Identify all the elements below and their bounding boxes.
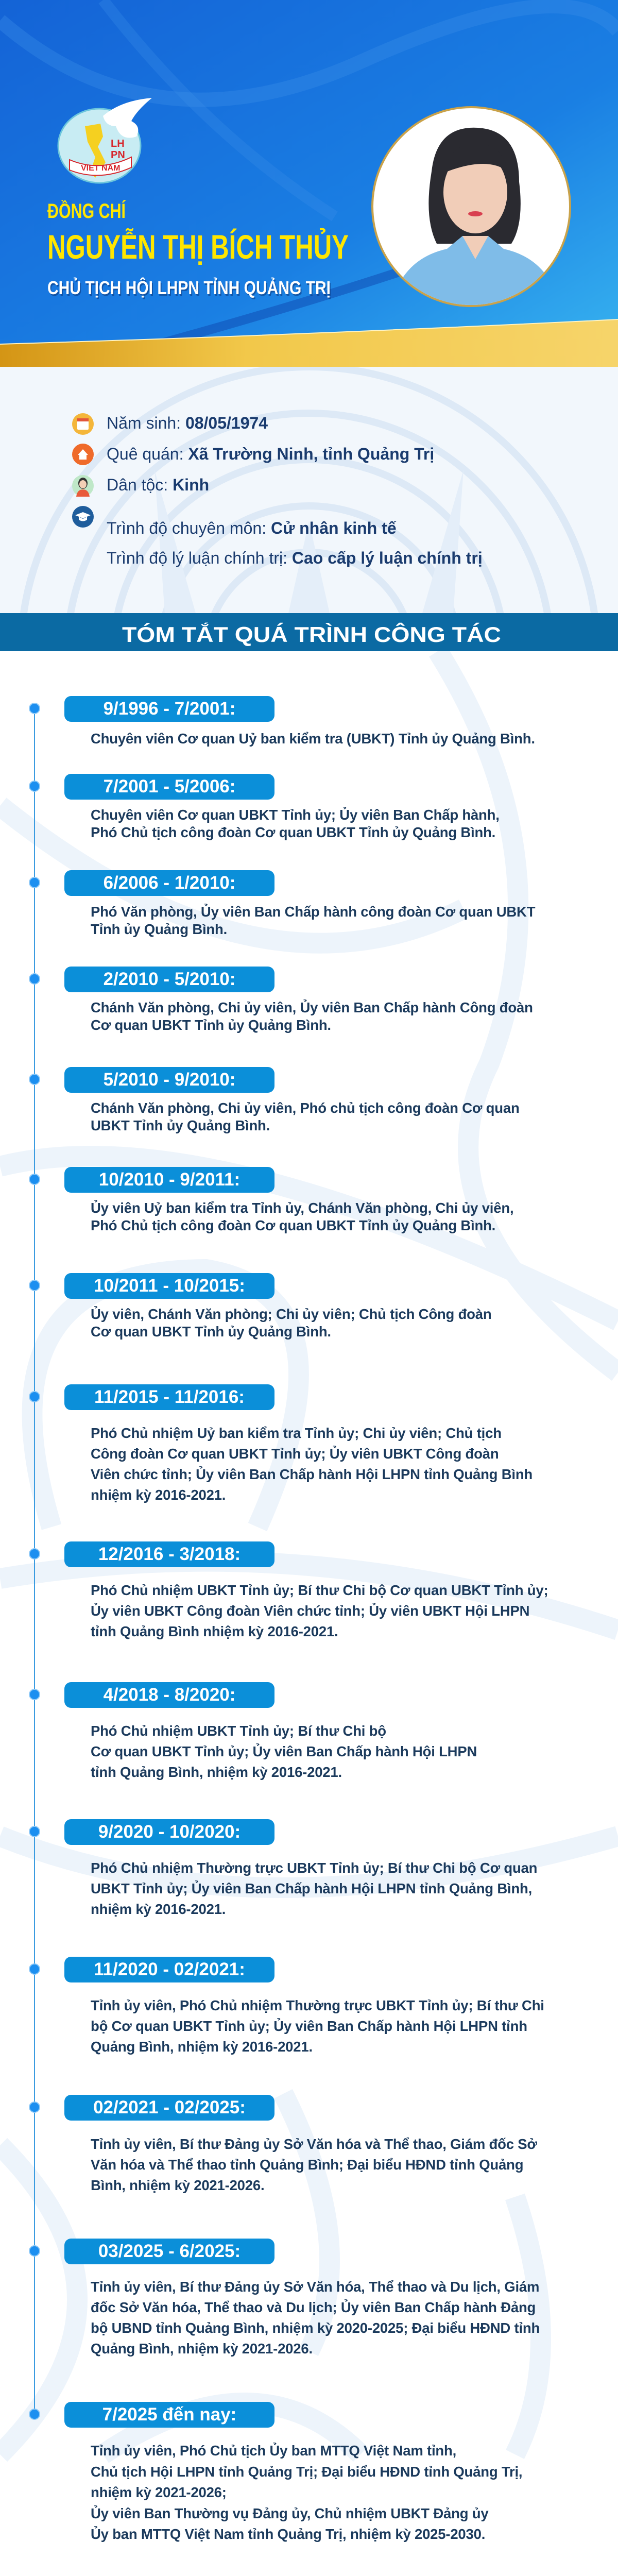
timeline entry: 2/2010 - 5/2010: Chánh Văn phòng, Chi ủy viên, Ủy viên Ban Chấp hành Công đoàn	[91, 999, 533, 1015]
timeline entry: 02/2021 - 02/2025: 02/2021 - 02/2025:	[93, 2097, 246, 2117]
info: education: Trình độ chuyên môn: Cử nhân kinh tế	[107, 519, 397, 537]
timeline entry: 6/2006 - 1/2010: Tỉnh ủy Quảng Bình.	[91, 921, 227, 937]
timeline entry: 02/2021 - 02/2025: Văn hóa và Thể thao tỉnh Quảng Bình; Đại biểu HĐND tỉnh Quảng	[91, 2157, 523, 2173]
info: ethnicity	[72, 475, 209, 497]
timeline entry: 03/2025 - 6/2025: 03/2025 - 6/2025:	[98, 2241, 241, 2261]
timeline entry: 7/2025 đến nay: nhiệm kỳ 2021-2026;	[91, 2484, 227, 2500]
info section background	[0, 367, 618, 613]
timeline entry: 11/2015 - 11/2016: Viên chức tỉnh; Ủy viên Ban Chấp hành Hội LHPN tỉnh Quảng Bình	[91, 1466, 533, 1482]
info: ethnicity: Dân tộc: Kinh	[107, 476, 209, 494]
header banner	[0, 0, 618, 367]
timeline entry: 5/2010 - 9/2010: Chánh Văn phòng, Chi ủy viên, Phó chủ tịch công đoàn Cơ quan	[91, 1100, 520, 1116]
timeline entry: 2/2010 - 5/2010: Cơ quan UBKT Tỉnh ủy Quảng Bình.	[91, 1017, 331, 1033]
timeline entry: 6/2006 - 1/2010: 6/2006 - 1/2010:	[104, 873, 235, 893]
logo: LHPN Vietnam: VIET NAM	[81, 164, 120, 173]
timeline entry: 6/2006 - 1/2010	[29, 870, 536, 937]
section banner: work summary	[0, 613, 618, 651]
timeline entry: 10/2011 - 10/2015	[29, 1273, 491, 1340]
timeline background swooshes	[0, 651, 618, 2463]
timeline entry: 11/2020 - 02/2021: Quảng Bình, nhiệm kỳ 2016-2021.	[91, 2039, 313, 2055]
timeline entry: 12/2016 - 3/2018: Phó Chủ nhiệm UBKT Tỉnh ủy; Bí thư Chi bộ Cơ quan UBKT Tỉnh ủy;	[91, 1582, 548, 1598]
timeline entry: 4/2018 - 8/2020	[29, 1682, 477, 1780]
portrait photo	[371, 106, 571, 307]
icon: graduation cap	[72, 506, 94, 528]
timeline entry: 02/2021 - 02/2025	[29, 2095, 537, 2193]
timeline entry: 5/2010 - 9/2010: 5/2010 - 9/2010:	[104, 1070, 235, 1090]
timeline entry: 12/2016 - 3/2018: tỉnh Quảng Bình nhiệm kỳ 2016-2021.	[91, 1623, 338, 1639]
timeline entry: 9/2020 - 10/2020: nhiệm kỳ 2016-2021.	[91, 1901, 226, 1917]
timeline entry: 12/2016 - 3/2018: 12/2016 - 3/2018:	[98, 1544, 241, 1564]
timeline entry: 11/2015 - 11/2016: nhiệm kỳ 2016-2021.	[91, 1487, 226, 1503]
logo: LHPN Vietnam: LH	[111, 138, 125, 149]
timeline entry: 6/2006 - 1/2010: Phó Văn phòng, Ủy viên Ban Chấp hành công đoàn Cơ quan UBKT	[91, 904, 535, 920]
timeline entry: 4/2018 - 8/2020: Phó Chủ nhiệm UBKT Tỉnh ủy; Bí thư Chi bộ	[91, 1723, 386, 1739]
timeline entry: 03/2025 - 6/2025	[29, 2239, 540, 2357]
timeline entry: 02/2021 - 02/2025: Bình, nhiệm kỳ 2021-2026.	[91, 2177, 264, 2193]
timeline entry: 03/2025 - 6/2025: Tỉnh ủy viên, Bí thư Đảng ủy Sở Văn hóa, Thể thao và Du lịch, Giám	[91, 2279, 539, 2295]
timeline entry: 10/2011 - 10/2015: Cơ quan UBKT Tỉnh ủy Quảng Bình.	[91, 1324, 331, 1340]
timeline entry: 9/1996 - 7/2001	[29, 696, 535, 747]
icon: calendar	[72, 413, 94, 435]
timeline entry: 11/2015 - 11/2016: Công đoàn Cơ quan UBKT Tỉnh ủy; Ủy viên UBKT Công đoàn	[91, 1446, 499, 1462]
timeline entry: 7/2025 đến nay: Ủy ban MTTQ Việt Nam tỉnh Quảng Trị, nhiệm kỳ 2025-2030.	[91, 2526, 485, 2542]
timeline entry: 11/2015 - 11/2016: Phó Chủ nhiệm Uỷ ban kiểm tra Tỉnh ủy; Chi ủy viên; Chủ tịch	[91, 1425, 502, 1441]
timeline entry: 03/2025 - 6/2025: Quảng Bình, nhiệm kỳ 2021-2026.	[91, 2341, 313, 2357]
timeline entry: 11/2020 - 02/2021: Tỉnh ủy viên, Phó Chủ nhiệm Thường trực UBKT Tỉnh ủy; Bí thư Chi	[91, 1997, 544, 2013]
timeline entry: 03/2025 - 6/2025: bộ UBND tỉnh Quảng Bình, nhiệm kỳ 2020-2025; Đại biểu HĐND tỉnh	[91, 2320, 540, 2336]
timeline entry: 7/2025 đến nay: Tỉnh ủy viên, Phó Chủ tịch Ủy ban MTTQ Việt Nam tỉnh,	[91, 2443, 456, 2459]
info: birth date: Năm sinh: 08/05/1974	[107, 414, 268, 432]
timeline entry: 11/2020 - 02/2021: 11/2020 - 02/2021:	[94, 1959, 245, 1979]
timeline entry: 7/2001 - 5/2006: Chuyên viên Cơ quan UBKT Tỉnh ủy; Ủy viên Ban Chấp hành,	[91, 807, 500, 823]
timeline entry: 7/2025 đến nay: Chủ tịch Hội LHPN tỉnh Quảng Trị; Đại biểu HĐND tỉnh Quảng Trị,	[91, 2464, 522, 2479]
timeline entry: 9/2020 - 10/2020: UBKT Tỉnh ủy; Ủy viên Ban Chấp hành Hội LHPN tỉnh Quảng Bình,	[91, 1880, 532, 1896]
timeline entry: 7/2025 đến nay: Ủy viên Ban Thường vụ Đảng ủy, Chủ nhiệm UBKT Đảng ủy	[91, 2505, 488, 2521]
timeline entry: 9/2020 - 10/2020: Phó Chủ nhiệm Thường trực UBKT Tỉnh ủy; Bí thư Chi bộ Cơ quan	[91, 1860, 537, 1876]
info: education	[72, 506, 397, 537]
timeline entry: 2/2010 - 5/2010	[29, 967, 533, 1033]
timeline entry: 11/2020 - 02/2021	[29, 1957, 544, 2055]
timeline entry: 4/2018 - 8/2020: tỉnh Quảng Bình, nhiệm kỳ 2016-2021.	[91, 1764, 342, 1780]
timeline entry: 9/2020 - 10/2020	[29, 1819, 537, 1917]
timeline entry: 4/2018 - 8/2020: Cơ quan UBKT Tỉnh ủy; Ủy viên Ban Chấp hành Hội LHPN	[91, 1743, 477, 1759]
timeline entry: 10/2010 - 9/2011: Phó Chủ tịch công đoàn Cơ quan UBKT Tỉnh ủy Quảng Bình.	[91, 1217, 495, 1233]
logo: LHPN Vietnam	[58, 98, 152, 183]
timeline entry: 12/2016 - 3/2018	[29, 1541, 548, 1639]
timeline entry: 12/2016 - 3/2018: Ủy viên UBKT Công đoàn Viên chức tỉnh; Ủy viên UBKT Hội LHPN	[91, 1603, 529, 1619]
timeline entry: 2/2010 - 5/2010: 2/2010 - 5/2010:	[104, 969, 235, 989]
timeline entry: 10/2010 - 9/2011: Ủy viên Uỷ ban kiểm tra Tỉnh ủy, Chánh Văn phòng, Chi ủy viên,	[91, 1200, 513, 1216]
timeline entry: 10/2011 - 10/2015: 10/2011 - 10/2015:	[94, 1276, 245, 1296]
timeline entry: 7/2001 - 5/2006: 7/2001 - 5/2006:	[104, 776, 235, 796]
timeline entry: 03/2025 - 6/2025: đốc Sở Văn hóa, Thể thao và Du lịch; Ủy viên Ban Chấp hành Đảng	[91, 2299, 536, 2315]
timeline entry: 9/2020 - 10/2020: 9/2020 - 10/2020:	[98, 1822, 241, 1842]
info: hometown: Quê quán: Xã Trường Ninh, tỉnh Quảng Trị	[107, 445, 434, 463]
info: political theory: Trình độ lý luận chính trị: Cao cấp lý luận chính trị	[107, 549, 483, 567]
timeline entry: 11/2020 - 02/2021: bộ Cơ quan UBKT Tỉnh ủy; Ủy viên Ban Chấp hành Hội LHPN tỉnh	[91, 2018, 527, 2034]
timeline entry: 7/2025 đến nay	[29, 2402, 522, 2542]
timeline entry: 11/2015 - 11/2016	[29, 1384, 533, 1503]
timeline entry: 10/2010 - 9/2011	[29, 1167, 513, 1233]
timeline entry: 02/2021 - 02/2025: Tỉnh ủy viên, Bí thư Đảng ủy Sở Văn hóa và Thể thao, Giám đốc Sở	[91, 2136, 537, 2152]
timeline entry: 11/2015 - 11/2016: 11/2015 - 11/2016:	[94, 1387, 245, 1407]
timeline entry: 7/2001 - 5/2006	[29, 774, 500, 840]
timeline entry: 7/2001 - 5/2006: Phó Chủ tịch công đoàn Cơ quan UBKT Tỉnh ủy Quảng Bình.	[91, 824, 495, 840]
timeline entry: 9/1996 - 7/2001: Chuyên viên Cơ quan Uỷ ban kiểm tra (UBKT) Tỉnh ủy Quảng Bình.	[91, 731, 535, 747]
logo: LHPN Vietnam: PN	[111, 149, 125, 161]
timeline entry: 9/1996 - 7/2001: 9/1996 - 7/2001:	[104, 699, 235, 719]
timeline entry: 10/2010 - 9/2011: 10/2010 - 9/2011:	[99, 1170, 240, 1190]
timeline entry: 10/2011 - 10/2015: Ủy viên, Chánh Văn phòng; Chi ủy viên; Chủ tịch Công đoàn	[91, 1306, 491, 1322]
icon: person	[72, 475, 94, 497]
timeline vertical line	[34, 708, 35, 2414]
icon: house	[72, 444, 94, 465]
timeline entry: 5/2010 - 9/2010	[29, 1067, 520, 1133]
timeline entry: 7/2025 đến nay: 7/2025 đến nay:	[102, 2404, 236, 2425]
timeline entry: 4/2018 - 8/2020: 4/2018 - 8/2020:	[104, 1685, 235, 1705]
timeline entry: 5/2010 - 9/2010: UBKT Tỉnh ủy Quảng Bình.	[91, 1117, 270, 1133]
section banner: work summary: TÓM TẮT QUÁ TRÌNH CÔNG TÁC	[122, 622, 501, 647]
